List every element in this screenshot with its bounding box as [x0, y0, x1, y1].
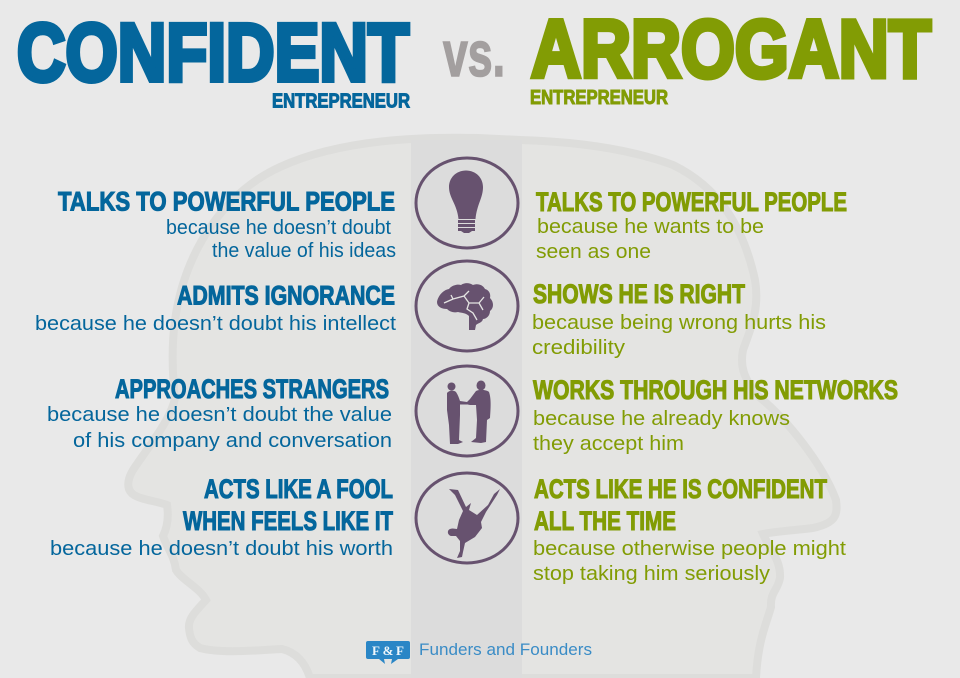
right text 2: SHOWS HE IS RIGHT	[533, 279, 745, 309]
left text 4	[50, 474, 393, 560]
left text 2: ADMITS IGNORANCE	[177, 280, 395, 310]
ring	[416, 366, 518, 456]
logo: funders and founders	[366, 640, 592, 664]
right text 2	[532, 279, 826, 359]
title: vs.: vs.	[443, 18, 505, 90]
icon: handshake	[416, 366, 518, 456]
right text 4: stop taking him seriously	[533, 563, 770, 585]
right text 3: they accept him	[533, 433, 684, 455]
left text 3: of his company and conversation	[73, 430, 392, 452]
title: arrogant: ENTREPRENEUR	[530, 87, 668, 109]
title: confident: CONFIDENT	[17, 8, 409, 98]
left man	[447, 382, 467, 444]
left text 2	[35, 280, 396, 335]
background head silhouette	[128, 138, 837, 678]
right text 3: because he already knows	[533, 408, 790, 430]
icon: light bulb	[416, 158, 518, 248]
left text 3: APPROACHES STRANGERS	[115, 374, 389, 404]
left text 3	[47, 374, 392, 452]
right text 1: TALKS TO POWERFUL PEOPLE	[536, 187, 847, 217]
right text 3	[533, 375, 898, 455]
left text 3: because he doesn’t doubt the value	[47, 404, 392, 426]
right text 1: because he wants to be	[537, 216, 764, 238]
left text 2: because he doesn’t doubt his intellect	[35, 313, 396, 335]
right text 1	[536, 187, 847, 263]
right text 2: credibility	[532, 337, 625, 359]
left text 1	[58, 186, 396, 262]
left text 1: because he doesn’t doubt	[166, 217, 391, 239]
right text 4: ALL THE TIME	[534, 506, 676, 536]
left text 4: WHEN FEELS LIKE IT	[183, 506, 393, 536]
left text 4: because he doesn’t doubt his worth	[50, 538, 393, 560]
logo icon: F&F	[372, 643, 404, 658]
right text 2: because being wrong hurts his	[532, 312, 826, 334]
left text 4: ACTS LIKE A FOOL	[204, 474, 393, 504]
right text 4: because otherwise people might	[533, 538, 846, 560]
right text 4: ACTS LIKE HE IS CONFIDENT	[534, 474, 827, 504]
central vertical band	[411, 140, 522, 678]
left text 1: the value of his ideas	[212, 240, 396, 262]
icon: breakdancer	[416, 473, 518, 563]
right man	[465, 380, 491, 443]
logo wordmark: Funders and Founders	[419, 640, 592, 659]
left text 1: TALKS TO POWERFUL PEOPLE	[58, 186, 395, 216]
right text 4	[533, 474, 846, 585]
title: confident: ENTREPRENEUR	[272, 90, 410, 112]
icon: brain	[416, 261, 518, 351]
logo icon	[366, 641, 410, 664]
right text 1: seen as one	[536, 241, 651, 263]
